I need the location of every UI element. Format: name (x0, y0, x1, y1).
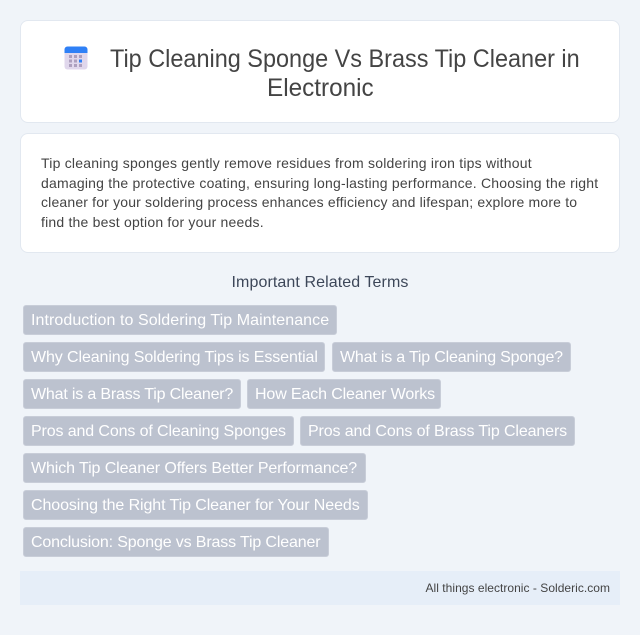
tag (23, 453, 366, 483)
tag (247, 379, 441, 409)
tag: Why Cleaning Soldering Tips is Essential (31, 349, 318, 366)
intro text panel (20, 133, 620, 253)
tag (23, 342, 325, 372)
tag (23, 490, 368, 520)
tag (23, 527, 329, 557)
footer bar (20, 571, 620, 605)
tag: Choosing the Right Tip Cleaner for Your Needs (31, 497, 360, 514)
tag (23, 416, 294, 446)
title: Tip Cleaning Sponge Vs Brass Tip Cleaner in (110, 45, 580, 73)
tag: Which Tip Cleaner Offers Better Performance? (31, 460, 357, 477)
tag: Pros and Cons of Cleaning Sponges (31, 423, 286, 440)
related terms tags (23, 305, 575, 557)
intro paragraph: damaging the protective coating, ensuring long-lasting performance. Choosing the right (41, 175, 598, 191)
title (110, 45, 580, 102)
header panel (20, 20, 620, 123)
tag: Introduction to Soldering Tip Maintenance (31, 312, 329, 329)
tag: Conclusion: Sponge vs Brass Tip Cleaner (31, 534, 320, 551)
title: Electronic (267, 74, 374, 102)
tag (23, 305, 337, 335)
tag: What is a Tip Cleaning Sponge? (340, 349, 563, 366)
footer text: All things electronic - Solderic.com (426, 581, 610, 595)
intro paragraph: find the best option for your needs. (41, 214, 264, 230)
icon: calendar (64, 46, 88, 70)
tag: Pros and Cons of Brass Tip Cleaners (308, 423, 567, 440)
intro paragraph: cleaner for your soldering process enhances efficiency and lifespan; explore more to (41, 194, 577, 210)
tag: What is a Brass Tip Cleaner? (31, 386, 233, 403)
section heading: Important Related Terms (232, 274, 408, 291)
tag (300, 416, 575, 446)
intro paragraph (41, 155, 598, 230)
tag: How Each Cleaner Works (255, 386, 435, 403)
tag (23, 379, 241, 409)
tag (332, 342, 571, 372)
intro paragraph: Tip cleaning sponges gently remove residues from soldering iron tips without (41, 155, 532, 171)
